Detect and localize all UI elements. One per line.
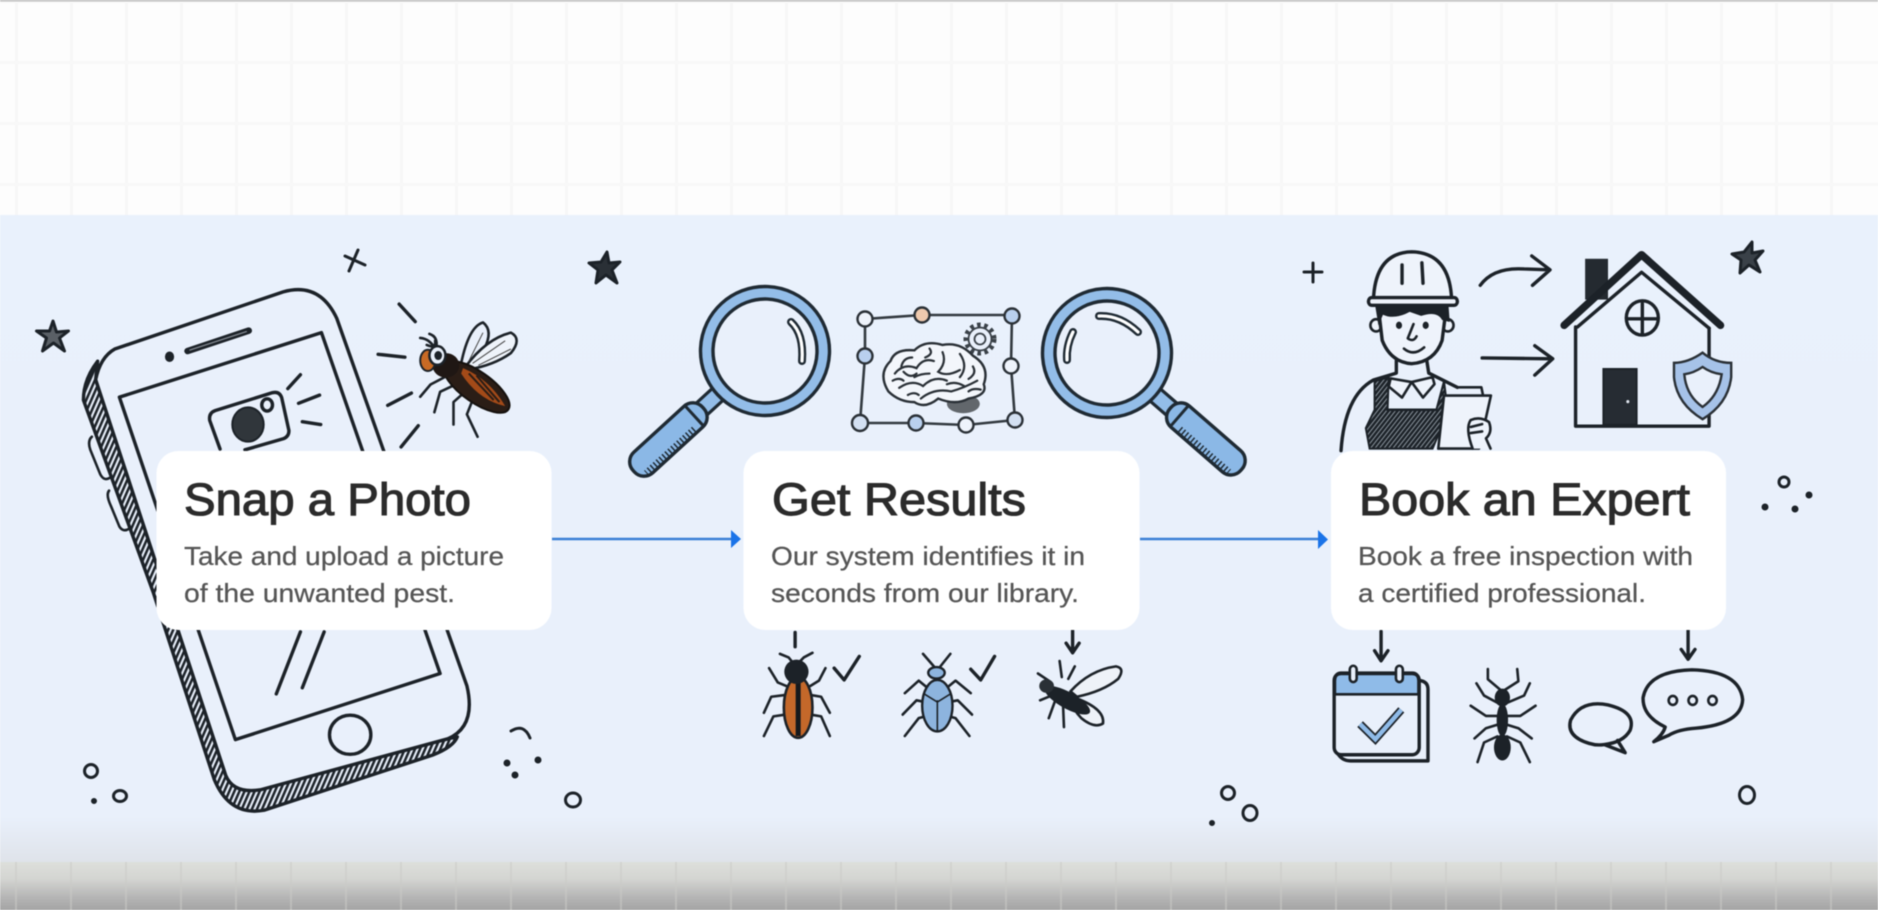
illustration: neural brain frame — [852, 308, 1022, 432]
card description: of the unwanted pest. — [184, 578, 455, 608]
phone screen — [119, 333, 440, 740]
overalls and shirt — [1341, 361, 1457, 451]
left lens highlight inner — [791, 322, 802, 361]
check mark — [834, 656, 859, 680]
connecting frame — [860, 315, 1015, 425]
arrow to calendar — [1375, 631, 1388, 661]
shield — [1674, 353, 1731, 419]
connector above orange beetle — [793, 632, 797, 647]
card: book an expert — [1331, 451, 1726, 630]
arrow: step one to step two — [552, 530, 741, 548]
background: grid paper top band — [0, 0, 1878, 215]
illustration: inspector with helmet — [1341, 252, 1491, 451]
chimney — [1585, 259, 1608, 300]
brain — [883, 343, 986, 413]
phone side buttons — [89, 437, 129, 530]
roof — [1564, 255, 1721, 328]
clipboard and hand — [1438, 387, 1491, 449]
illustration: identified pest row — [764, 631, 1121, 738]
large speech bubble — [1643, 670, 1743, 742]
illustration: left magnifying glass — [590, 260, 856, 519]
phone speaker and camera — [165, 331, 249, 362]
frame nodes — [852, 308, 1022, 432]
card description: Book a free inspection with — [1358, 541, 1693, 571]
card description: a certified professional. — [1358, 578, 1646, 608]
scattered doodles: stars, circles, dots — [36, 242, 1811, 824]
illustration: right magnifying glass — [1016, 262, 1284, 518]
fly pest — [420, 322, 517, 437]
right lens highlights — [1067, 316, 1138, 360]
arrow: inspector to house straight — [1482, 346, 1553, 375]
calendar — [1334, 666, 1428, 761]
blue beetle — [903, 654, 972, 736]
phone hatched side band — [83, 361, 457, 811]
arrow: inspector to house curved — [1480, 256, 1550, 285]
phone front outline — [96, 290, 469, 791]
round window — [1626, 301, 1658, 335]
card description: Take and upload a picture — [184, 541, 504, 571]
home button — [330, 715, 371, 754]
head and face — [1370, 307, 1454, 364]
screen glare lines — [276, 632, 324, 694]
card: get results — [744, 451, 1140, 630]
check mark — [971, 656, 995, 680]
door — [1603, 369, 1637, 425]
left lens highlight — [791, 322, 802, 361]
card heading: Snap a Photo — [184, 474, 471, 525]
orange beetle — [764, 653, 830, 738]
black fly — [1038, 661, 1121, 727]
background: grey bottom band — [0, 862, 1878, 910]
card heading: Get Results — [772, 474, 1026, 525]
card: snap a photo — [156, 451, 552, 630]
ant — [1471, 669, 1536, 762]
card description: seconds from our library. — [771, 578, 1079, 608]
illustration: house with shield — [1564, 255, 1731, 426]
background: light blue panel — [0, 215, 1878, 862]
helmet — [1368, 252, 1457, 305]
arrow: step two to step three — [1140, 530, 1328, 549]
arrow to chat — [1681, 630, 1695, 659]
card description: Our system identifies it in — [771, 541, 1085, 571]
small speech bubble — [1570, 704, 1631, 753]
illustration: booking row — [1334, 630, 1743, 762]
motion lines around fly — [378, 304, 418, 447]
illustration: smartphone taking a photo — [83, 290, 517, 811]
gear — [966, 325, 994, 353]
house walls — [1576, 327, 1709, 426]
arrow above fly — [1066, 631, 1079, 653]
camera icon on screen — [210, 375, 321, 450]
card heading: Book an Expert — [1359, 474, 1691, 525]
